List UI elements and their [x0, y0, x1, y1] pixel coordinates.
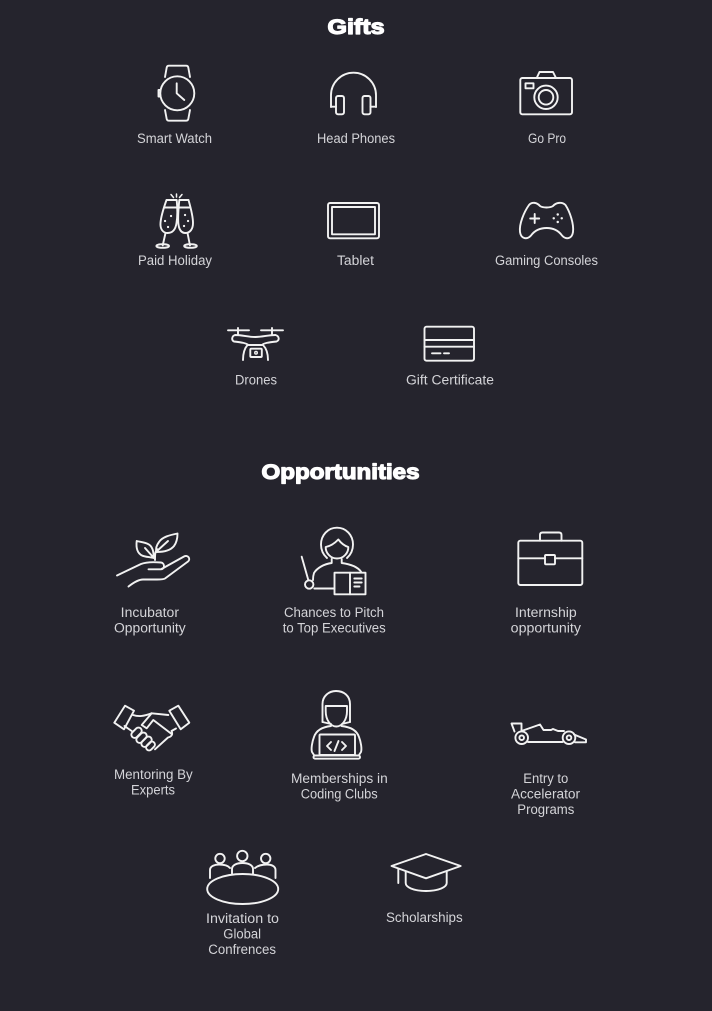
label: Incubator — [121, 605, 180, 620]
item: go pro — [520, 72, 572, 146]
icon: headphones — [331, 73, 376, 114]
item: memberships in coding clubs — [291, 691, 388, 802]
label: Gift Certificate — [406, 372, 494, 388]
label: Global — [223, 926, 261, 942]
label — [114, 605, 186, 636]
label: opportunity — [511, 620, 581, 636]
label: Internship — [515, 605, 577, 620]
label: Chances to Pitch — [284, 605, 384, 620]
item: incubator opportunity — [114, 534, 189, 636]
heading: Gifts: Gifts — [328, 16, 384, 39]
icon: presenter with book — [302, 528, 366, 594]
label: Gaming Consoles — [495, 253, 598, 268]
item: tablet — [328, 203, 379, 268]
item: scholarships — [386, 854, 463, 925]
icon: graduation cap — [392, 854, 461, 891]
label — [283, 605, 386, 636]
icon: round table meeting — [207, 851, 278, 904]
icon: race car — [512, 724, 586, 744]
item: smart watch — [137, 66, 212, 146]
label: Go Pro — [528, 131, 566, 146]
icon: champagne glasses — [156, 194, 197, 248]
icon: camera — [520, 72, 572, 114]
label: Mentoring By — [114, 767, 193, 782]
label: Invitation to — [206, 911, 279, 926]
label: Tablet — [337, 253, 374, 268]
icon: handshake — [114, 706, 189, 752]
item: mentoring by experts — [114, 706, 193, 798]
label: Coding Clubs — [301, 786, 378, 802]
item: internship opportunity — [511, 532, 582, 636]
item: head phones — [317, 73, 395, 146]
icon: game controller — [520, 203, 573, 238]
icon: gift card — [424, 327, 474, 361]
item: drones — [228, 328, 283, 388]
label: Head Phones — [317, 131, 395, 146]
icon: drone — [228, 328, 283, 360]
label: to Top Executives — [283, 620, 386, 636]
label: Experts — [131, 782, 175, 798]
icon: hand with plant — [117, 534, 189, 586]
label: Confrences — [208, 942, 276, 957]
item: paid holiday — [138, 194, 212, 268]
icon: coder with laptop — [312, 691, 361, 759]
item: invitation to global confrences — [206, 851, 279, 957]
label — [511, 771, 581, 817]
label — [511, 605, 581, 636]
item: gaming consoles — [495, 203, 598, 268]
label: Smart Watch — [137, 131, 212, 146]
item: gift certificate — [406, 327, 494, 388]
label: Scholarships — [386, 910, 463, 925]
label — [291, 771, 388, 802]
label: Memberships in — [291, 771, 388, 786]
label: Drones — [235, 372, 277, 388]
label: Paid Holiday — [138, 253, 212, 268]
icon: tablet — [328, 203, 379, 238]
heading: Opportunities: Opportunities — [262, 461, 420, 484]
icon: briefcase — [518, 532, 582, 585]
label: Opportunity — [114, 620, 186, 636]
label — [114, 767, 193, 798]
icon: watch — [158, 66, 194, 121]
label — [206, 911, 279, 957]
item: chances to pitch — [283, 528, 386, 636]
item: entry to accelerator programs — [511, 724, 586, 817]
label: Accelerator — [511, 786, 581, 802]
label: Programs — [517, 802, 575, 817]
label: Entry to — [523, 771, 568, 786]
